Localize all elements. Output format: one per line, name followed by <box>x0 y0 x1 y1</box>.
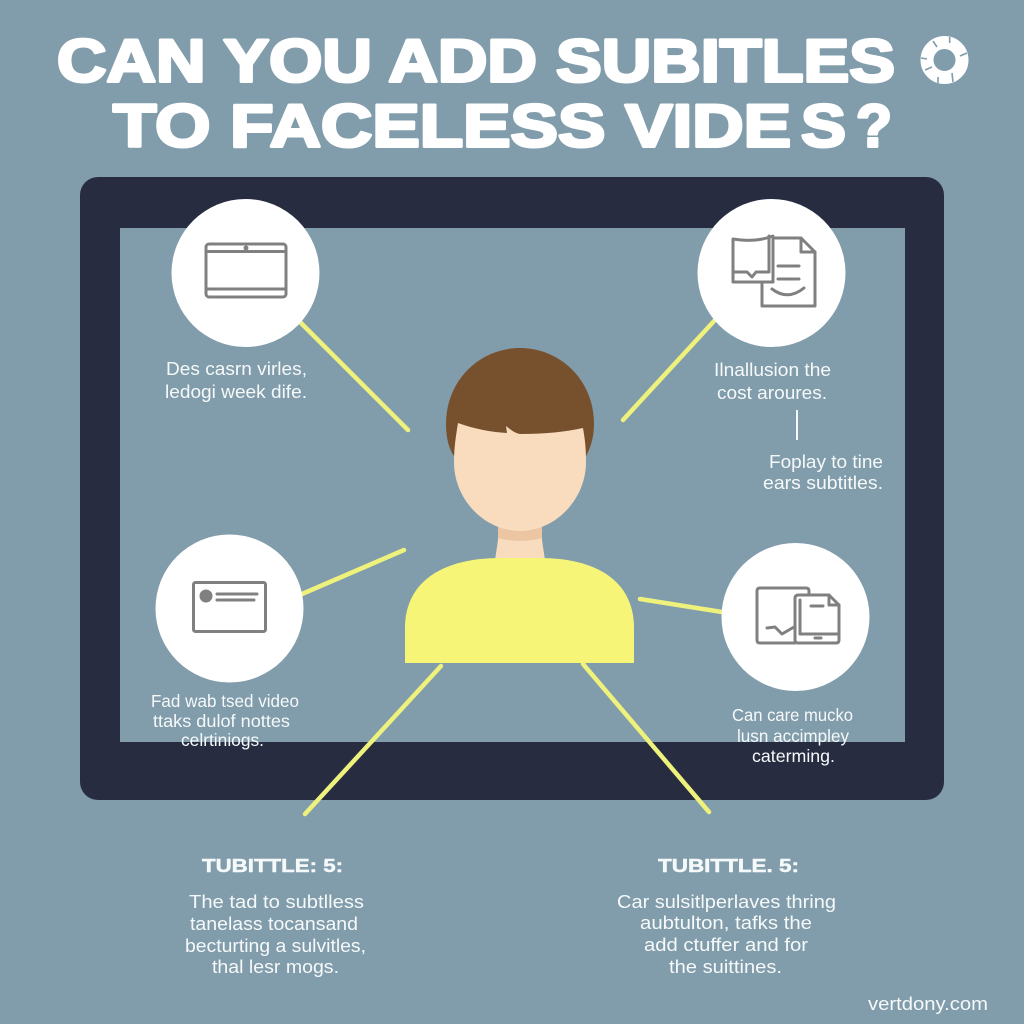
title: TO FACELESS VIDE <box>113 92 791 160</box>
text block 5 <box>732 705 853 766</box>
text block 2: cost aroures. <box>717 382 827 403</box>
title <box>57 28 895 160</box>
circle 4: devices icon <box>722 543 870 691</box>
text block 4: celrtiniogs. <box>181 730 264 750</box>
title: ? <box>856 92 892 160</box>
face <box>454 423 586 531</box>
circle 2: documents icon <box>698 199 846 347</box>
text block 3: Foplay to tine <box>769 451 883 472</box>
text block 5: Can care mucko <box>732 705 853 725</box>
bottom left text: The tad to subtlless <box>189 891 364 912</box>
text block 1: ledogi week dife. <box>165 381 307 402</box>
bottom left text: becturting a sulvitles, <box>185 935 366 956</box>
neck <box>495 520 545 560</box>
bottom left heading: TUBITTLE: 5: <box>202 855 343 876</box>
text block 4: ttaks dulof nottes <box>153 711 290 731</box>
connector lines <box>300 320 722 814</box>
icon: gear ring <box>921 37 967 83</box>
circle 3: card icon <box>156 534 304 682</box>
panel: screen frame <box>80 177 944 800</box>
text block 3 <box>763 451 883 493</box>
bottom left text <box>185 891 366 977</box>
neck shadow <box>498 526 542 541</box>
bottom left text: thal lesr mogs. <box>212 956 339 977</box>
title: CAN YOU ADD SUBITLES <box>57 28 895 94</box>
hair <box>446 348 594 456</box>
text block 5: caterming. <box>752 746 835 766</box>
text block 2: Ilnallusion the <box>714 359 831 380</box>
text block 2 <box>714 359 831 403</box>
website credit: vertdony.com <box>868 993 988 1014</box>
bottom right text: aubtulton, tafks the <box>640 912 812 933</box>
bottom right heading: TUBITTLE. 5: <box>658 855 799 876</box>
text block 4 <box>151 691 299 750</box>
text block 5: lusn accimpley <box>737 726 849 746</box>
text block 1 <box>165 358 307 402</box>
bottom left block <box>185 855 366 977</box>
bottom right text: the suittines. <box>669 956 782 977</box>
bottom right text: add ctuffer and for <box>644 934 808 955</box>
text block 1: Des casrn virles, <box>166 358 307 379</box>
shirt <box>405 558 634 663</box>
bottom right text <box>617 891 836 977</box>
divider tick <box>796 410 798 440</box>
text block 4: Fad wab tsed video <box>151 691 299 711</box>
bottom left text: tanelass tocansand <box>190 913 358 934</box>
bottom right text: Car sulsitlperlaves thring <box>617 891 836 912</box>
text block 3: ears subtitles. <box>763 472 883 493</box>
faceless person <box>405 348 634 663</box>
title: S <box>801 92 846 160</box>
circle 1: tablet icon <box>172 199 320 347</box>
bottom right block <box>617 855 836 977</box>
